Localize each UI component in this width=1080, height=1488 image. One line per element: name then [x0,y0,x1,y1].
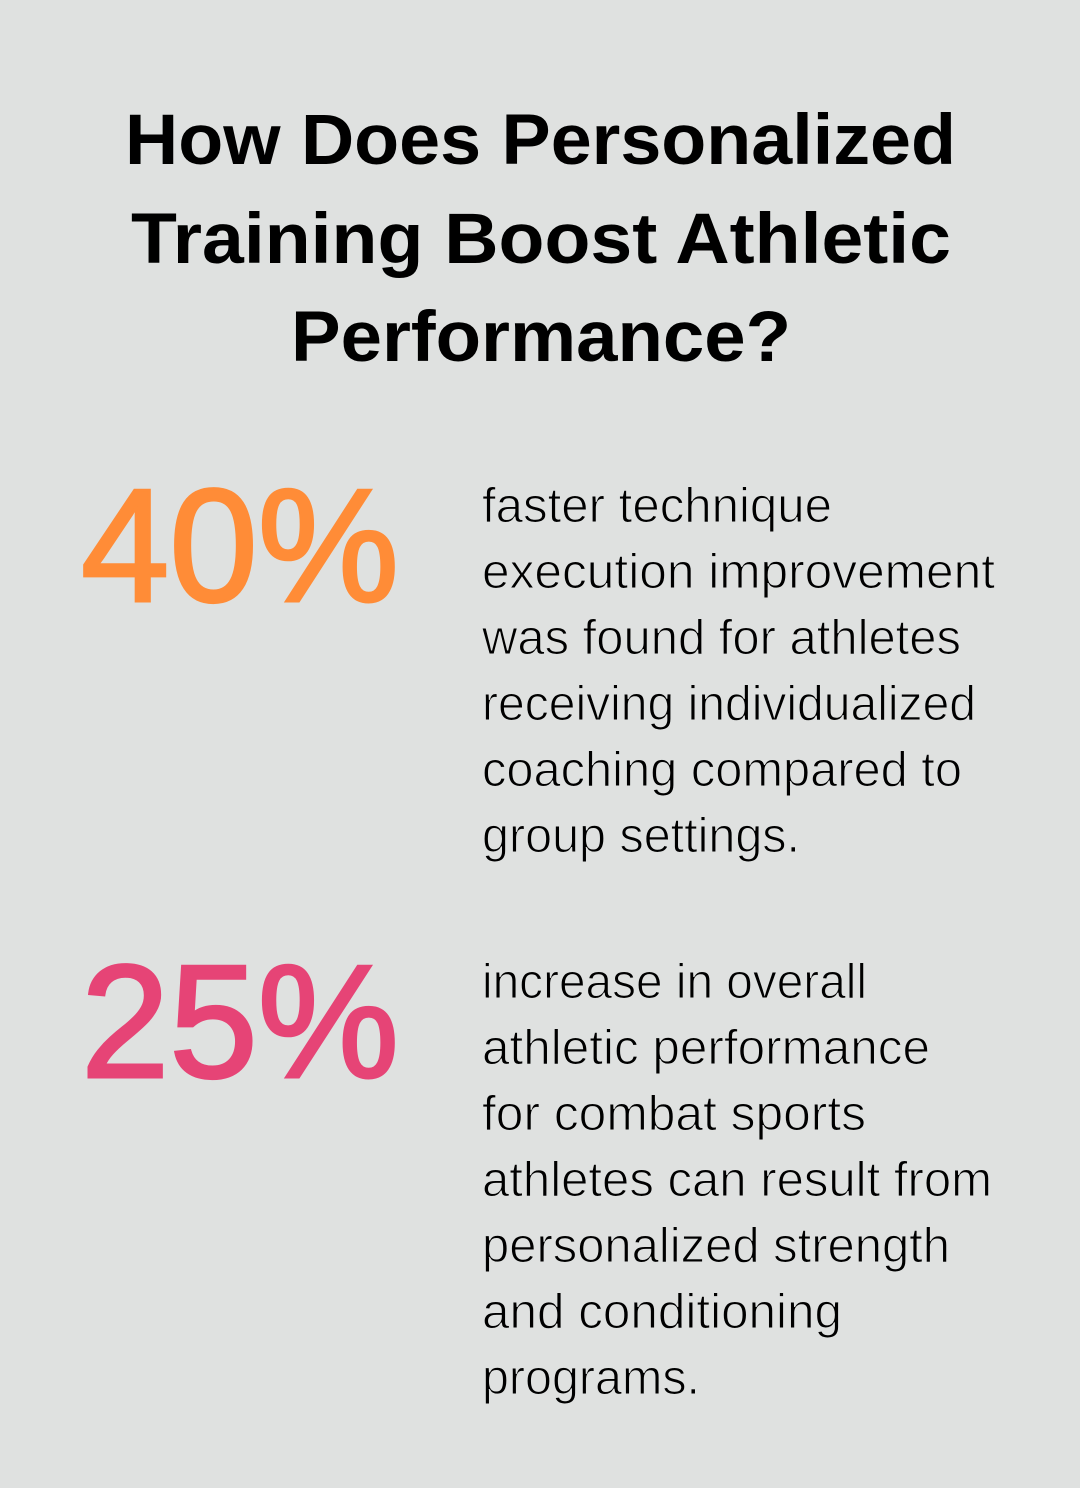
title: How Does Personalized [125,101,956,180]
text block: 25% description: increase in overall [482,955,867,1009]
text block: 25% description: athletic performance [482,1021,930,1075]
text block: 40% description: receiving individualized [482,677,976,731]
title: Performance? [291,298,791,377]
text block: 25% description: programs. [482,1351,700,1405]
text block: 40% description: faster technique [482,479,832,533]
big number: 40%: 40% [81,456,399,636]
text block: 40% description: execution improvement [482,545,995,599]
text block: 40% description: group settings. [482,809,800,863]
title [125,101,956,377]
big number: 25%: 25% [81,932,399,1112]
text block: 25% description: for combat sports [482,1087,866,1141]
text block: 40% description [481,479,995,863]
text block: 40% description: was found for athletes [481,611,961,665]
panel: 40% statistic [81,456,995,863]
panel: 25% statistic [81,932,992,1405]
text block: 25% description: athletes can result from [482,1153,992,1207]
title: Training Boost Athletic [131,200,951,279]
text block: 25% description: personalized strength [482,1219,950,1273]
text block: 25% description: and conditioning [482,1285,842,1339]
text block: 25% description [482,955,992,1405]
text block: 40% description: coaching compared to [482,743,962,797]
